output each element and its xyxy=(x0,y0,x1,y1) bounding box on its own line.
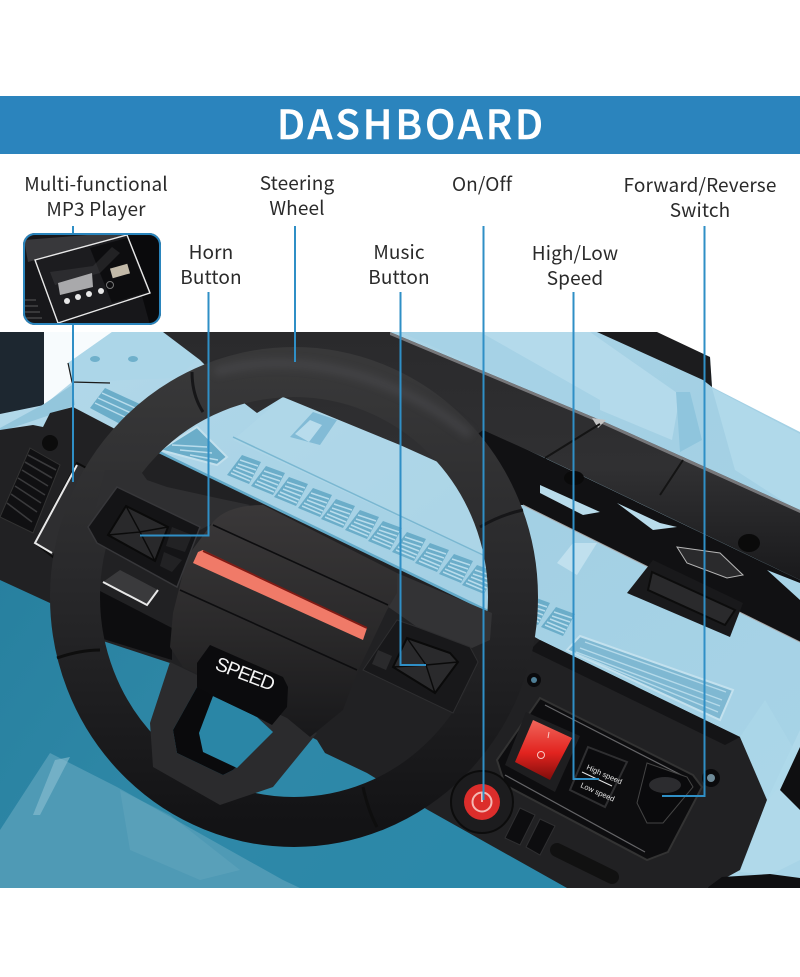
right fender xyxy=(740,730,800,875)
hub xyxy=(170,505,397,737)
rear black trim xyxy=(597,332,712,387)
switch console xyxy=(497,673,720,877)
label: high/low speed: Speed xyxy=(547,264,603,291)
rocker switch xyxy=(515,720,572,780)
hood vents xyxy=(90,388,575,636)
left pod xyxy=(88,487,200,587)
slots xyxy=(505,808,535,845)
leader line: steering wheel xyxy=(294,226,296,362)
red light stripe xyxy=(193,550,367,640)
speed plate xyxy=(197,645,288,725)
spoke opening xyxy=(199,696,273,768)
MP3 player inset xyxy=(23,233,161,325)
windshield frame xyxy=(163,332,800,642)
steering wheel rim xyxy=(57,363,523,827)
label: multi-functional MP3 player: Multi-functional xyxy=(24,170,168,197)
speed label: Low speed xyxy=(579,781,616,804)
window handle xyxy=(627,566,740,637)
label: horn button: Button xyxy=(180,263,242,290)
label: music button: Music xyxy=(373,238,425,265)
banner: DASHBOARD xyxy=(0,93,800,154)
white highlight and post xyxy=(44,332,112,405)
leader line: high/low speed xyxy=(574,292,599,779)
photo: steering wheel and dashboard xyxy=(0,332,800,888)
title: DASHBOARD xyxy=(277,93,543,151)
label: horn button: Horn xyxy=(189,238,233,265)
leader line: forward/reverse xyxy=(662,226,704,796)
label: steering wheel: Steering xyxy=(260,169,334,196)
dark dashboard xyxy=(0,407,767,888)
shield button xyxy=(637,763,693,823)
leader line: on/off xyxy=(482,226,484,800)
label: forward/reverse switch: Switch xyxy=(670,196,730,223)
hood vent strip line xyxy=(157,451,492,613)
label: steering wheel: Wheel xyxy=(269,194,325,221)
right spoke arm xyxy=(387,573,492,648)
leader line: horn button xyxy=(140,292,208,536)
label: multi-functional MP3 player: MP3 Player xyxy=(46,195,146,222)
power button xyxy=(451,771,513,833)
upper hood highlight xyxy=(480,332,680,440)
lower spoke xyxy=(150,662,317,805)
label: high/low speed: High/Low xyxy=(532,239,618,266)
right pod xyxy=(363,620,478,713)
label: music button: Button xyxy=(368,263,430,290)
left dash details xyxy=(0,435,172,660)
floor xyxy=(0,570,570,888)
hood tabs xyxy=(290,412,597,575)
right grille xyxy=(567,636,733,720)
label: on/off: On/Off xyxy=(452,170,513,197)
speed plate: SPEED xyxy=(212,653,278,696)
wheel spoke arm xyxy=(129,473,250,530)
leader line: MP3 player xyxy=(72,226,74,482)
label: forward/reverse switch: Forward/Reverse xyxy=(624,171,776,198)
speed label xyxy=(570,747,627,807)
white background top right xyxy=(655,332,800,432)
leader line: music button xyxy=(400,292,426,665)
speed label: High speed xyxy=(585,763,624,786)
